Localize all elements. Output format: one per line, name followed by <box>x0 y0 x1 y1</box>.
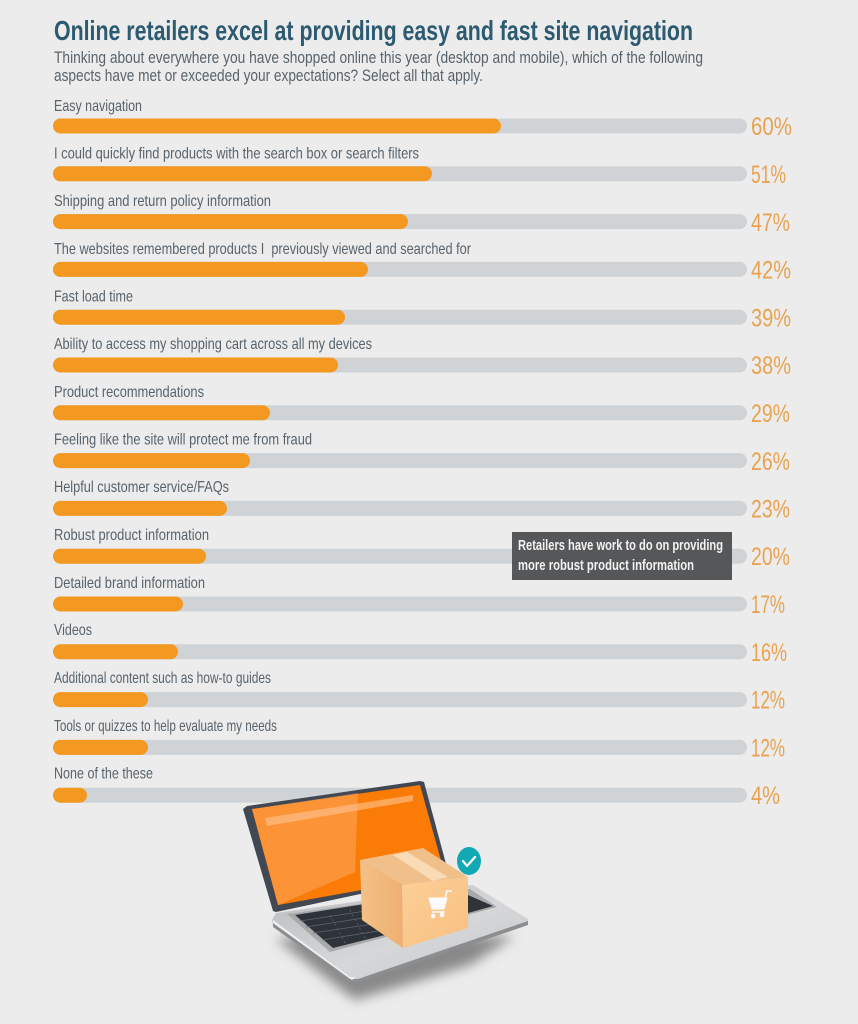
parcel box <box>360 848 468 948</box>
bar: robust product information 20%: Robust product information <box>54 527 209 544</box>
bar: customer service 23%: Helpful customer service/FAQs <box>54 479 229 496</box>
bar: additional content 12%: 12% <box>751 686 785 714</box>
cart icon <box>429 891 452 918</box>
bar: tools or quizzes 12% <box>53 718 785 762</box>
bar: videos 16%: Videos <box>54 622 92 639</box>
bar: videos 16% <box>53 622 787 667</box>
bar: none of these 4% <box>53 766 780 810</box>
bar: shopping cart across devices 38%: 38% <box>751 352 791 380</box>
bar: robust product information 20%: 20% <box>751 543 790 571</box>
bar: product recommendations 29%: Product recommendations <box>54 384 204 401</box>
bar: product recommendations 29% <box>53 384 790 428</box>
bar: remembered products 42%: 42% <box>751 256 791 284</box>
bar: additional content 12%: Additional content such as how-to guides <box>54 670 271 687</box>
bar: search box 51%: I could quickly find products with the search box or search filters <box>54 146 419 162</box>
icon: laptop with parcel <box>243 781 528 1000</box>
bar: shopping cart across devices 38%: Ability to access my shopping cart across all my devices <box>54 336 372 353</box>
bar: videos 16%: 16% <box>751 639 787 667</box>
bar: protect from fraud 26% <box>53 432 790 476</box>
bar: none of these 4%: None of the these <box>54 766 153 782</box>
bar: Easy navigation 60%: Easy navigation <box>54 98 142 115</box>
bar: customer service 23%: 23% <box>751 496 790 524</box>
bar: protect from fraud 26%: 26% <box>751 448 790 476</box>
bar: detailed brand information 17%: Detailed brand information <box>54 575 205 592</box>
bar: search box 51%: 51% <box>751 161 786 189</box>
bar: tools or quizzes 12%: 12% <box>751 734 785 762</box>
bar: Easy navigation 60%: 60% <box>751 113 792 141</box>
subtitle <box>54 48 703 85</box>
callout: more robust product information <box>518 557 694 574</box>
bar: customer service 23% <box>53 479 790 524</box>
bar: Easy navigation 60% <box>53 98 792 141</box>
bar: shipping and return 47%: 47% <box>751 209 790 237</box>
bar: detailed brand information 17% <box>53 575 785 619</box>
check badge <box>457 847 481 875</box>
subtitle: Thinking about everywhere you have shopped online this year (desktop and mobile), which of the following <box>54 48 703 67</box>
callout: Retailers have work to do on providing <box>518 537 723 554</box>
bar: fast load time 39%: 39% <box>751 304 791 332</box>
laptop screen <box>243 781 449 912</box>
laptop base <box>272 885 528 983</box>
bar: fast load time 39% <box>53 288 791 332</box>
bar: none of these 4%: 4% <box>751 782 780 810</box>
bar: detailed brand information 17%: 17% <box>751 591 785 619</box>
bar: shipping and return 47%: Shipping and return policy information <box>54 193 271 210</box>
bar: additional content 12% <box>53 670 785 714</box>
bar: tools or quizzes 12%: Tools or quizzes to help evaluate my needs <box>54 718 277 735</box>
subtitle: aspects have met or exceeded your expectations? Select all that apply. <box>54 66 483 85</box>
bar: fast load time 39%: Fast load time <box>54 288 133 306</box>
bar: search box 51% <box>53 146 786 189</box>
bar: protect from fraud 26%: Feeling like the site will protect me from fraud <box>54 432 312 448</box>
bar: remembered products 42% <box>53 241 791 284</box>
bar: product recommendations 29%: 29% <box>751 400 790 428</box>
callout <box>512 532 732 580</box>
keyboard <box>295 895 493 948</box>
bar: shopping cart across devices 38% <box>53 336 791 380</box>
bar: shipping and return 47% <box>53 193 790 237</box>
bar: robust product information 20% <box>53 527 790 571</box>
laptop shadow <box>275 936 515 1000</box>
bar: remembered products 42%: The websites remembered products I previously viewed and searched for <box>54 241 472 258</box>
